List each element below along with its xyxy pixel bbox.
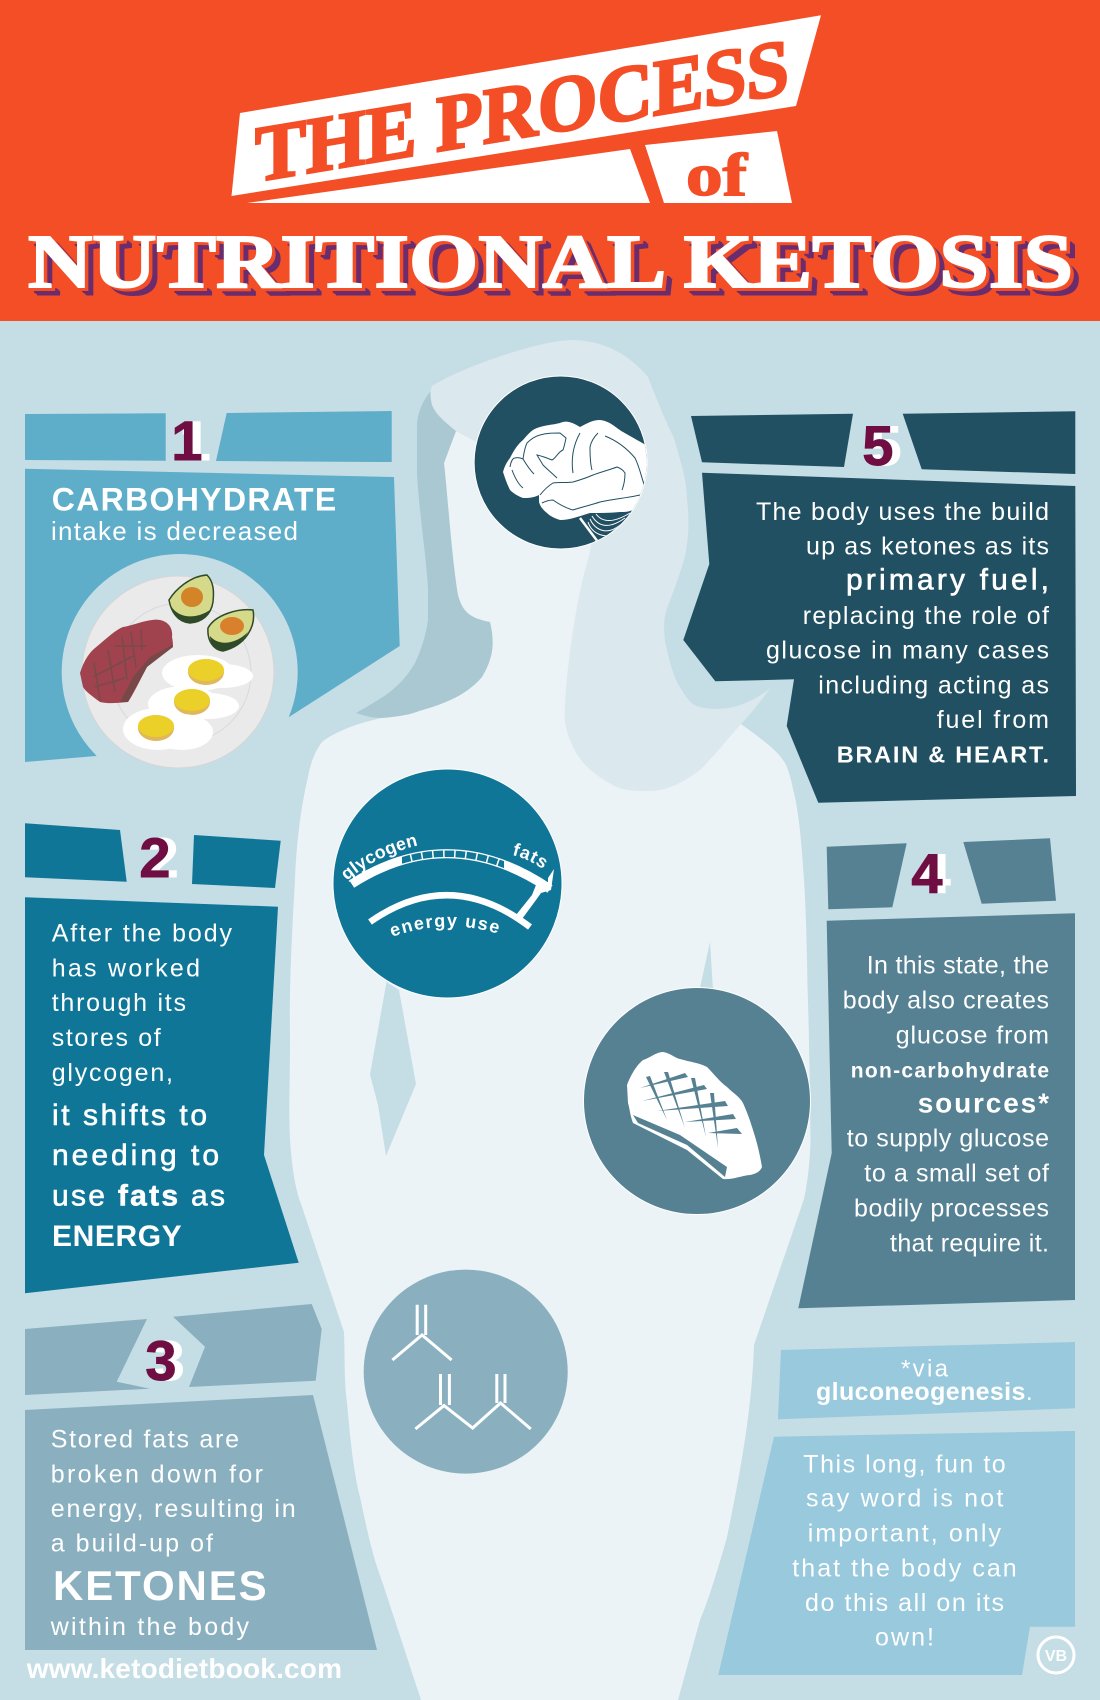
panel body [683, 473, 1076, 803]
panel body [798, 913, 1075, 1308]
panel text: use fats as [52, 1180, 225, 1213]
panel text [843, 951, 1049, 1258]
number 5: 5 [862, 414, 894, 477]
vb logo: VB [1045, 1648, 1067, 1665]
left arm gap [370, 982, 416, 1156]
header bar right [192, 835, 281, 888]
heading: CARBOHYDRATE [52, 482, 336, 518]
header bar right [173, 1304, 322, 1387]
steak fat [633, 1115, 727, 1177]
panel text: glucose in many cases [766, 637, 1049, 665]
explanation text [792, 1450, 1017, 1652]
avocado halves [169, 575, 213, 623]
panel text: bodily processes [854, 1195, 1049, 1223]
panel text: energy, resulting in [51, 1495, 296, 1523]
panel text: non-carbohydrate [851, 1059, 1049, 1082]
panel text: glucose from [896, 1021, 1049, 1049]
panel body [25, 469, 400, 762]
panel text: it shifts to [52, 1099, 207, 1132]
panel text: broken down for [51, 1460, 263, 1488]
panel text: a build-up of [51, 1530, 213, 1558]
icon: plate of food [80, 575, 274, 768]
panel text: The body uses the build [756, 498, 1049, 526]
label: energy use: energy use [390, 916, 499, 936]
header bar left [25, 1319, 150, 1395]
explanation text: important, only [808, 1520, 1002, 1548]
panel text: Stored fats are [51, 1425, 239, 1453]
icon: ketone molecules [364, 1270, 568, 1474]
panel text: sources* [918, 1087, 1049, 1118]
panel text: including acting as [818, 671, 1049, 699]
banner: lower wedge [247, 149, 650, 203]
panel text: glycogen, [52, 1059, 173, 1087]
icon: brain circle [474, 376, 650, 549]
explanation text: This long, fun to [803, 1450, 1006, 1478]
panel text: replacing the role of [803, 602, 1049, 630]
panel text: has worked [52, 954, 200, 982]
footnote panel: via gluconeogenesis [778, 1342, 1075, 1419]
molecule top [392, 1305, 452, 1360]
banner: of [645, 131, 792, 203]
number 3: 3 [145, 1329, 177, 1392]
title: the process: THE PROCESS [255, 23, 789, 200]
panel text: needing to [52, 1139, 219, 1172]
panel 3: ketones [25, 1304, 377, 1650]
gauge cells [402, 850, 504, 868]
label: fats: fats [514, 843, 546, 868]
icon: steak circle [584, 988, 810, 1214]
number 1: 1 [171, 409, 203, 472]
panel text: In this state, the [867, 951, 1049, 979]
gauge lower scale [370, 895, 530, 927]
panel text: stores of [52, 1024, 161, 1052]
panel 2: shift to fats [25, 823, 299, 1293]
hair: shadow side [356, 390, 493, 718]
cerebellum [597, 512, 631, 540]
panel body [25, 1395, 377, 1650]
panel text: to supply glucose [847, 1125, 1049, 1153]
panel text: that require it. [890, 1230, 1049, 1258]
panel text: through its [52, 989, 186, 1017]
title: nutritional ketosis: NUTRITIONAL KETOSIS [28, 220, 1073, 304]
number 2: 2 [139, 826, 171, 889]
explanation background [718, 1431, 1075, 1675]
header bar left [25, 413, 166, 461]
panel text [50, 1425, 296, 1641]
panel text: primary fuel, [846, 563, 1049, 596]
brain lobes [503, 420, 650, 520]
header bar right [963, 838, 1056, 904]
header bar left [25, 823, 127, 882]
panel text: body also creates [843, 986, 1049, 1014]
header bar right [903, 411, 1075, 474]
plate ring [62, 554, 298, 790]
explanation text: own! [875, 1624, 934, 1652]
panel 1: carbohydrate [25, 409, 400, 790]
fried eggs [162, 655, 234, 691]
panel 5: primary fuel [683, 411, 1076, 803]
panel 4: glucose creation [798, 838, 1075, 1308]
explanation text: say word is not [806, 1485, 1003, 1513]
panel text: to a small set of [864, 1160, 1049, 1188]
grill marks [640, 1072, 742, 1148]
panel text: up as ketones as its [806, 533, 1049, 561]
header [0, 0, 1100, 321]
molecule bottom [415, 1374, 531, 1429]
explanation text: that the body can [792, 1555, 1017, 1583]
gauge needle [516, 869, 554, 919]
brain folds [510, 433, 646, 510]
header bar right [216, 411, 392, 462]
steak [80, 620, 173, 703]
explanation panel [718, 1431, 1075, 1675]
silhouette of a woman [289, 340, 810, 1700]
footnote term: gluconeogenesis. [816, 1378, 1033, 1406]
footnote marker: *via [901, 1356, 949, 1383]
footnote background [778, 1342, 1075, 1419]
panel text [756, 498, 1049, 768]
icon: glycogen to fats gauge [332, 768, 562, 998]
panel text: KETONES [53, 1562, 267, 1609]
panel text: fuel from [937, 706, 1049, 734]
panel body [25, 897, 299, 1293]
number 4: 4 [911, 842, 943, 905]
header bar left [827, 843, 907, 909]
panel text: BRAIN & HEART. [837, 742, 1049, 768]
steak [627, 1052, 762, 1179]
label: glycogen: glycogen [342, 836, 417, 882]
body [289, 431, 810, 1700]
right arm gap [700, 942, 713, 990]
vb logo [1038, 1637, 1074, 1673]
panel text: After the body [52, 920, 233, 948]
header bar left [691, 414, 853, 467]
hair: light side [430, 340, 770, 791]
website url: www.ketodietbook.com [26, 1653, 342, 1684]
gauge upper scale [352, 854, 550, 889]
panel text [52, 920, 233, 1253]
title: of: of [686, 142, 748, 208]
panel text: ENERGY [52, 1220, 182, 1253]
panel text: within the body [50, 1613, 250, 1641]
banner: the process [232, 15, 821, 196]
header background [0, 0, 1100, 321]
subheading: intake is decreased [51, 516, 298, 546]
explanation text: do this all on its [805, 1589, 1004, 1617]
